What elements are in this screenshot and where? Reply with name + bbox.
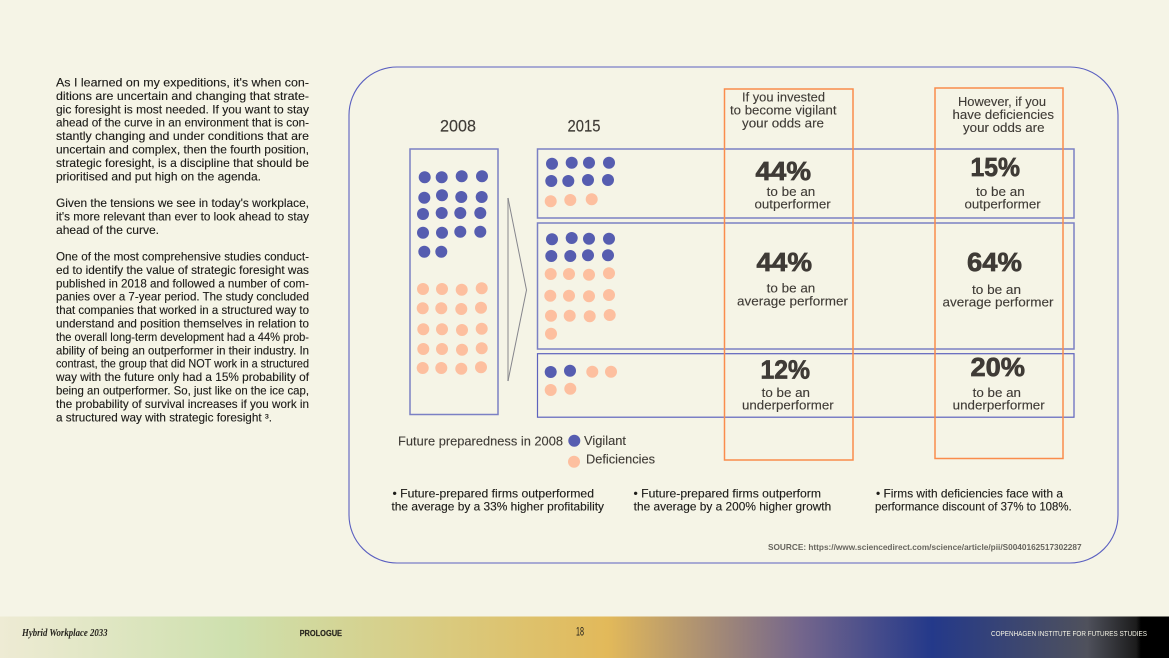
text block: body copy: a structured way with strategic foresight ³. [56,411,272,424]
heading: vigilant odds: to become vigilant [730,102,837,118]
heading: deficiencies odds: have deficiencies [952,107,1055,122]
text block: body copy: it's more relevant than ever to look ahead to stay [56,210,309,223]
footer: section name: PROLOGUE [300,629,343,638]
heading: vigilant odds: If you invested [742,90,825,105]
stat: 64% average performer: to be an [972,282,1021,297]
dots: 2015 average performers [544,232,616,340]
stat: 64% average performer: average performer [942,294,1054,310]
stat: 15% outperformer [964,152,1041,212]
stat: 20% underperformer: underperformer [953,398,1045,413]
heading: deficiencies odds: your odds are [963,120,1044,135]
column: vigilant odds [724,89,853,460]
stat: 15% outperformer: to be an [976,184,1025,199]
text block: body copy: gic foresight is most needed. If you want to stay [56,103,309,116]
text block: body copy: panies over a 7-year period. The study concluded [56,291,309,304]
bullet: growth [634,488,831,514]
bullet: profitability: the average by a 33% higher profitability [392,501,604,514]
bullet: profitability [392,488,604,514]
dots: 2015 underperformers [545,365,617,396]
box: 2008 firms [410,149,498,414]
stat: 44% average performer: to be an [767,281,815,296]
stat: 12% underperformer [742,355,834,413]
box: 2015 outperformers row [538,149,1074,218]
bullet: performance discount: • Firms with deficiencies face with a [876,488,1064,501]
stat: 20% underperformer: 20% [970,352,1025,382]
legend: Deficiencies [586,452,655,467]
footer: publication title: Hybrid Workplace 2033 [21,628,108,639]
legend [398,433,655,468]
text block: body copy: the overall long-term development had a 44% prob- [56,331,309,344]
heading: deficiencies odds: However, if you [958,94,1046,109]
dots: 2015 outperformers [545,157,615,207]
heading: 2015: 2015 [568,117,600,136]
stat: 44% average performer [737,247,849,308]
stat: 44% average performer: average performer [737,294,849,308]
stat: 64% average performer: 64% [967,247,1022,277]
stat: 44% average performer: 44% [756,247,812,277]
panel: future preparedness study [349,67,1118,563]
source line: SOURCE: https://www.sciencedirect.com/science/article/pii/S0040162517302287 [768,542,1082,552]
text block: body copy: stantly changing and under conditions that are [56,130,309,143]
stat: 44% outperformer: 44% [756,156,811,186]
stat: 64% average performer [942,247,1054,310]
text block: body copy: ed to identify the value of strategic foresight was [56,264,309,277]
text block: body copy: ahead of the curve in an environment that is con- [56,117,309,130]
dots: 2008 deficiencies [417,282,488,375]
stat: 12% underperformer: underperformer [742,398,834,413]
text block: body copy: being an outperformer. So, just like on the ice cap, [56,384,309,398]
box: 2015 underperformers row [538,354,1074,417]
text block: body copy: ahead of the curve. [56,224,159,237]
bullet: growth: • Future-prepared firms outperform [634,488,821,501]
heading: deficiencies odds [952,94,1055,135]
text block: body copy [55,76,310,424]
stat: 44% outperformer: to be an [767,184,815,199]
footer: page number: 18 [576,626,584,638]
text block: body copy: published in 2018 and followed a number of com- [56,277,309,290]
text block: body copy: that companies that worked in a structured way to [56,304,309,317]
stat: 15% outperformer: 15% [970,152,1020,182]
text block: body copy: contrast, the group that did NOT work in a structured [56,358,309,371]
text block: body copy: strategic foresight, is a discipline that should be [56,157,309,170]
column: deficiencies odds [935,88,1063,458]
text block: body copy: the probability of survival increases if you work in [56,398,309,411]
text block: body copy: ability of being an outperformer in their industry. In [56,344,309,357]
legend: Future preparedness in 2008 [398,434,563,449]
bullet: performance discount: performance discount of 37% to 108%. [875,501,1072,514]
footer: organisation: COPENHAGEN INSTITUTE FOR FUTURES STUDIES [991,629,1147,638]
arrow: 2008 to 2015 [508,198,526,381]
bullet: profitability: • Future-prepared firms outperformed [392,488,594,501]
legend: Vigilant [584,433,626,448]
heading: vigilant odds [730,90,837,130]
stat: 44% outperformer: outperformer [754,197,831,212]
text block: body copy: prioritised and put high on the agenda. [56,170,261,183]
stat: 12% underperformer: 12% [760,355,810,385]
dots: 2008 vigilant [417,170,488,258]
footer band [0,616,1169,658]
heading: 2008: 2008 [440,117,476,136]
text block: body copy: understand and position themselves in relation to [56,318,309,330]
stat: 15% outperformer: outperformer [964,197,1041,212]
stat: 20% underperformer [953,352,1045,413]
bullet: growth: the average by a 200% higher growth [634,501,831,514]
text block: body copy: ditions are uncertain and changing that strate- [56,90,309,103]
stat: 20% underperformer: to be an [973,385,1021,400]
heading: vigilant odds: your odds are [742,116,824,130]
stat: 44% outperformer [754,156,831,212]
text block: body copy: One of the most comprehensive studies conduct- [56,250,309,264]
text block: body copy: As I learned on my expeditions, it's when con- [56,76,309,90]
bullet: performance discount [875,488,1072,514]
text block: body copy: Given the tensions we see in today's workplace, [56,197,309,210]
stat: 12% underperformer: to be an [762,385,810,400]
text block: body copy: uncertain and complex, then the fourth position, [56,144,309,156]
box: 2015 average performers row [538,223,1074,349]
text block: body copy: way with the future only had a 15% probability of [55,371,310,384]
